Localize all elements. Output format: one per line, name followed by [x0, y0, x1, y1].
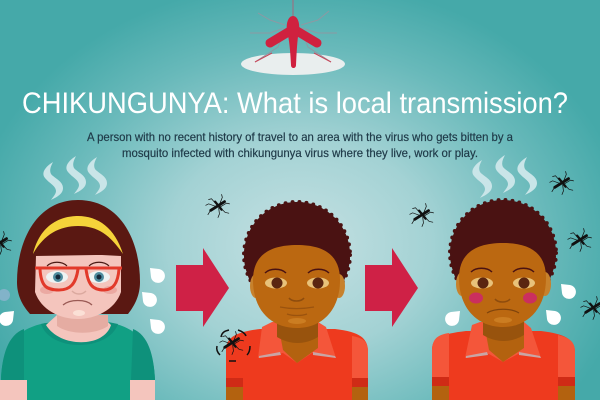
icon: heat waves left — [43, 156, 107, 200]
boy 1: neck — [277, 318, 318, 363]
girl: glasses — [35, 268, 122, 290]
girl: fringe — [35, 222, 121, 256]
boy 2: brows, nose, frown — [471, 268, 534, 272]
boy 1: collar — [258, 322, 336, 363]
sick girl — [0, 200, 155, 400]
description text — [87, 130, 513, 160]
boy 2: ears — [456, 272, 468, 296]
boy 1: eyes — [265, 278, 287, 288]
sick boy — [432, 200, 575, 400]
description text: mosquito infected with chikungunya virus where they live, work or play. — [122, 146, 478, 160]
girl: shirt — [1, 323, 155, 400]
girl: hair — [17, 200, 140, 314]
boy 1: hair — [244, 202, 350, 308]
boy 1: ears — [250, 274, 262, 298]
boy 2: arms — [432, 386, 575, 400]
boy 2: rash cheeks — [469, 292, 483, 304]
boy 1: brows, nose, smile — [265, 269, 329, 273]
boy 1: shirt — [226, 329, 368, 400]
boy 2: eyes — [471, 278, 493, 288]
icon: sweat drops girl — [0, 268, 165, 334]
arrow 2 — [365, 248, 418, 327]
boy 1: face — [253, 245, 340, 328]
arrow 1 — [176, 248, 229, 327]
boy 2: shirt — [432, 331, 575, 400]
girl: arms — [0, 380, 155, 400]
boy 1: arms — [226, 386, 368, 400]
icon: red mosquito on white ellipse — [241, 0, 345, 75]
healthy boy — [226, 202, 368, 400]
boy 2: collar — [465, 322, 541, 362]
boy 2: neck — [483, 318, 524, 362]
bitten mosquito with motion marks — [217, 330, 250, 361]
icon: sweat drops boy — [445, 284, 576, 326]
icon: blue blotch — [0, 289, 10, 301]
icon: heat waves right — [472, 155, 537, 198]
girl: eyes — [46, 271, 68, 283]
girl: cheeks nose mouth — [40, 286, 54, 294]
girl: face — [35, 255, 121, 319]
boy 2: hair — [450, 200, 556, 306]
icon: mosquitoes — [0, 171, 600, 320]
description text: A person with no recent history of travel to an area with the virus who gets bitten by a — [87, 130, 513, 144]
girl: headband — [33, 216, 123, 254]
girl: neck — [46, 315, 111, 342]
boy 2: face — [459, 243, 546, 327]
